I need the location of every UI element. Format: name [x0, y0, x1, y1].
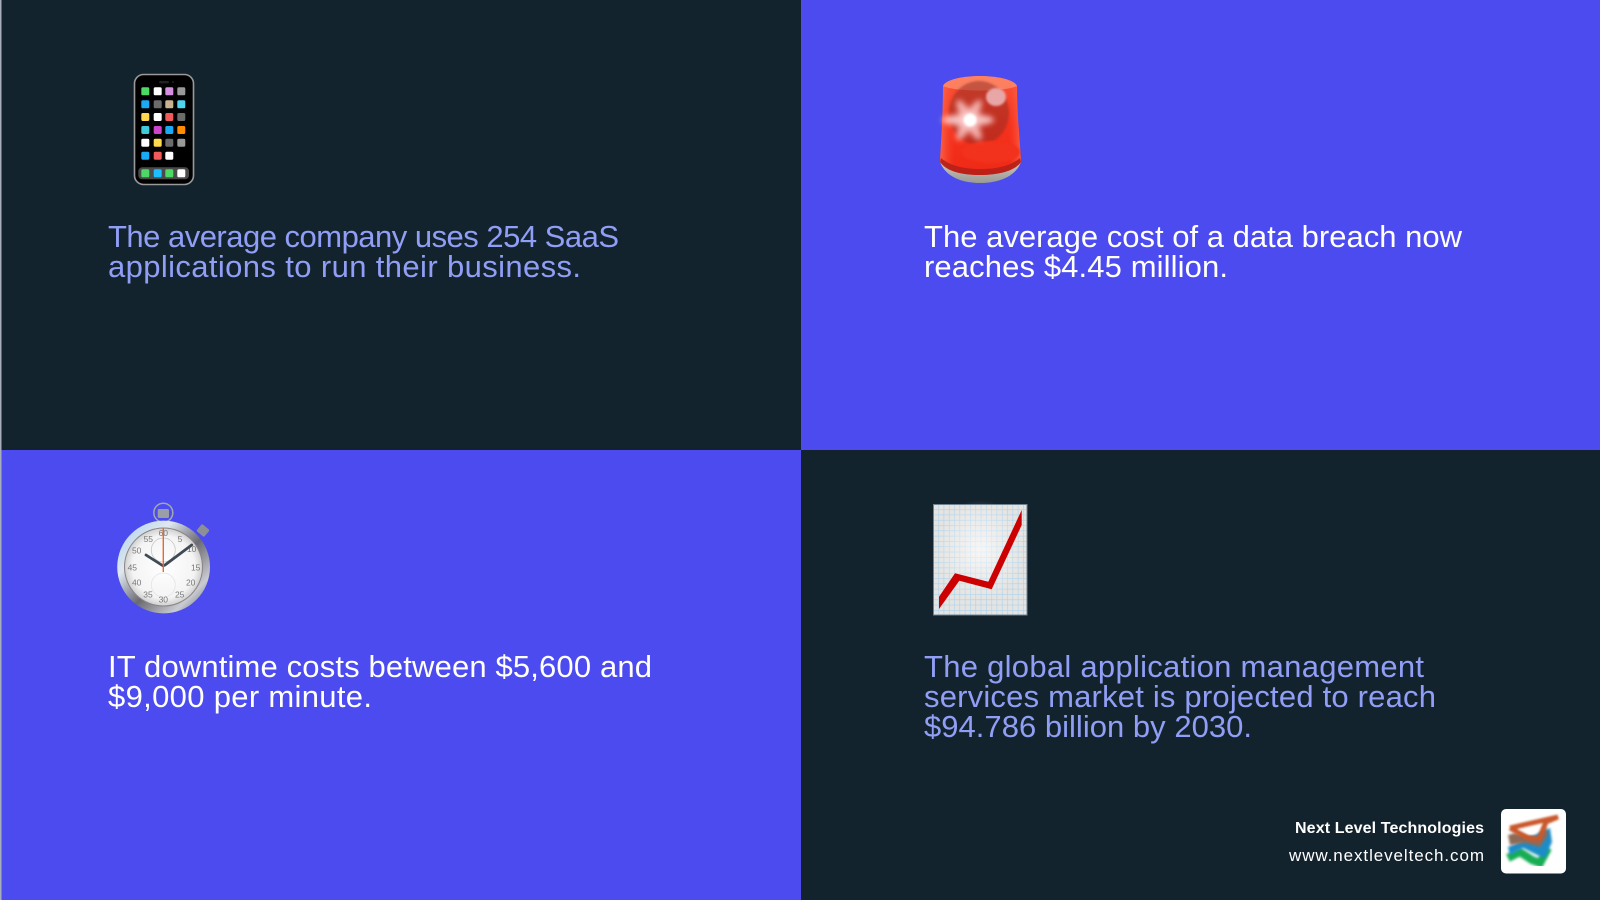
- icon: stopwatch: 40: [132, 577, 142, 587]
- icon: stopwatch: 10: [187, 544, 197, 554]
- icon: stopwatch: 15: [191, 562, 201, 572]
- icon: mobile phone: [134, 74, 194, 184]
- panel: left edge strip: [0, 0, 2, 900]
- panel: top left dark background: [2, 0, 801, 450]
- text: data breach statistic: [924, 219, 1463, 284]
- text: market statistic: $94.786 billion by 2030.: [924, 709, 1252, 744]
- text: downtime statistic: [108, 649, 652, 714]
- panel: bottom right dark background: [801, 450, 1600, 900]
- text: SaaS statistic: The average company uses 254 SaaS: [108, 219, 619, 254]
- text: data breach statistic: reaches $4.45 million.: [924, 249, 1228, 284]
- icon: stopwatch: 25: [175, 589, 185, 599]
- text: SaaS statistic: [108, 219, 619, 284]
- icon: stopwatch: 50: [132, 546, 142, 556]
- text: downtime statistic: IT downtime costs between $5,600 and: [108, 649, 652, 684]
- text: market statistic: [924, 649, 1436, 744]
- text: data breach statistic: The average cost of a data breach now: [924, 219, 1463, 254]
- panel: bottom left blue background: [2, 450, 801, 900]
- icon: stopwatch: 30: [159, 594, 168, 604]
- logo: [1501, 809, 1566, 874]
- brand name: Next Level Technologies: [1295, 820, 1484, 837]
- text: downtime statistic: $9,000 per minute.: [108, 679, 372, 714]
- text: SaaS statistic: applications to run their business.: [108, 249, 581, 284]
- text: market statistic: The global application management: [924, 649, 1424, 684]
- icon: stopwatch: [117, 503, 210, 613]
- icon: stopwatch: 55: [144, 534, 153, 544]
- icon: stopwatch: 45: [128, 562, 137, 572]
- website url: www.nextleveltech.com: [1288, 846, 1484, 865]
- panel: top right blue background: [801, 0, 1600, 450]
- icon: stopwatch: 35: [143, 589, 153, 599]
- icon: rising chart: [934, 500, 1027, 615]
- icon: stopwatch: 5: [178, 534, 183, 544]
- icon: stopwatch: 60: [159, 528, 168, 538]
- icon: police light: [940, 76, 1021, 183]
- text: market statistic: services market is projected to reach: [924, 679, 1436, 714]
- icon: stopwatch: 20: [186, 578, 196, 588]
- brand footer: [1288, 809, 1566, 874]
